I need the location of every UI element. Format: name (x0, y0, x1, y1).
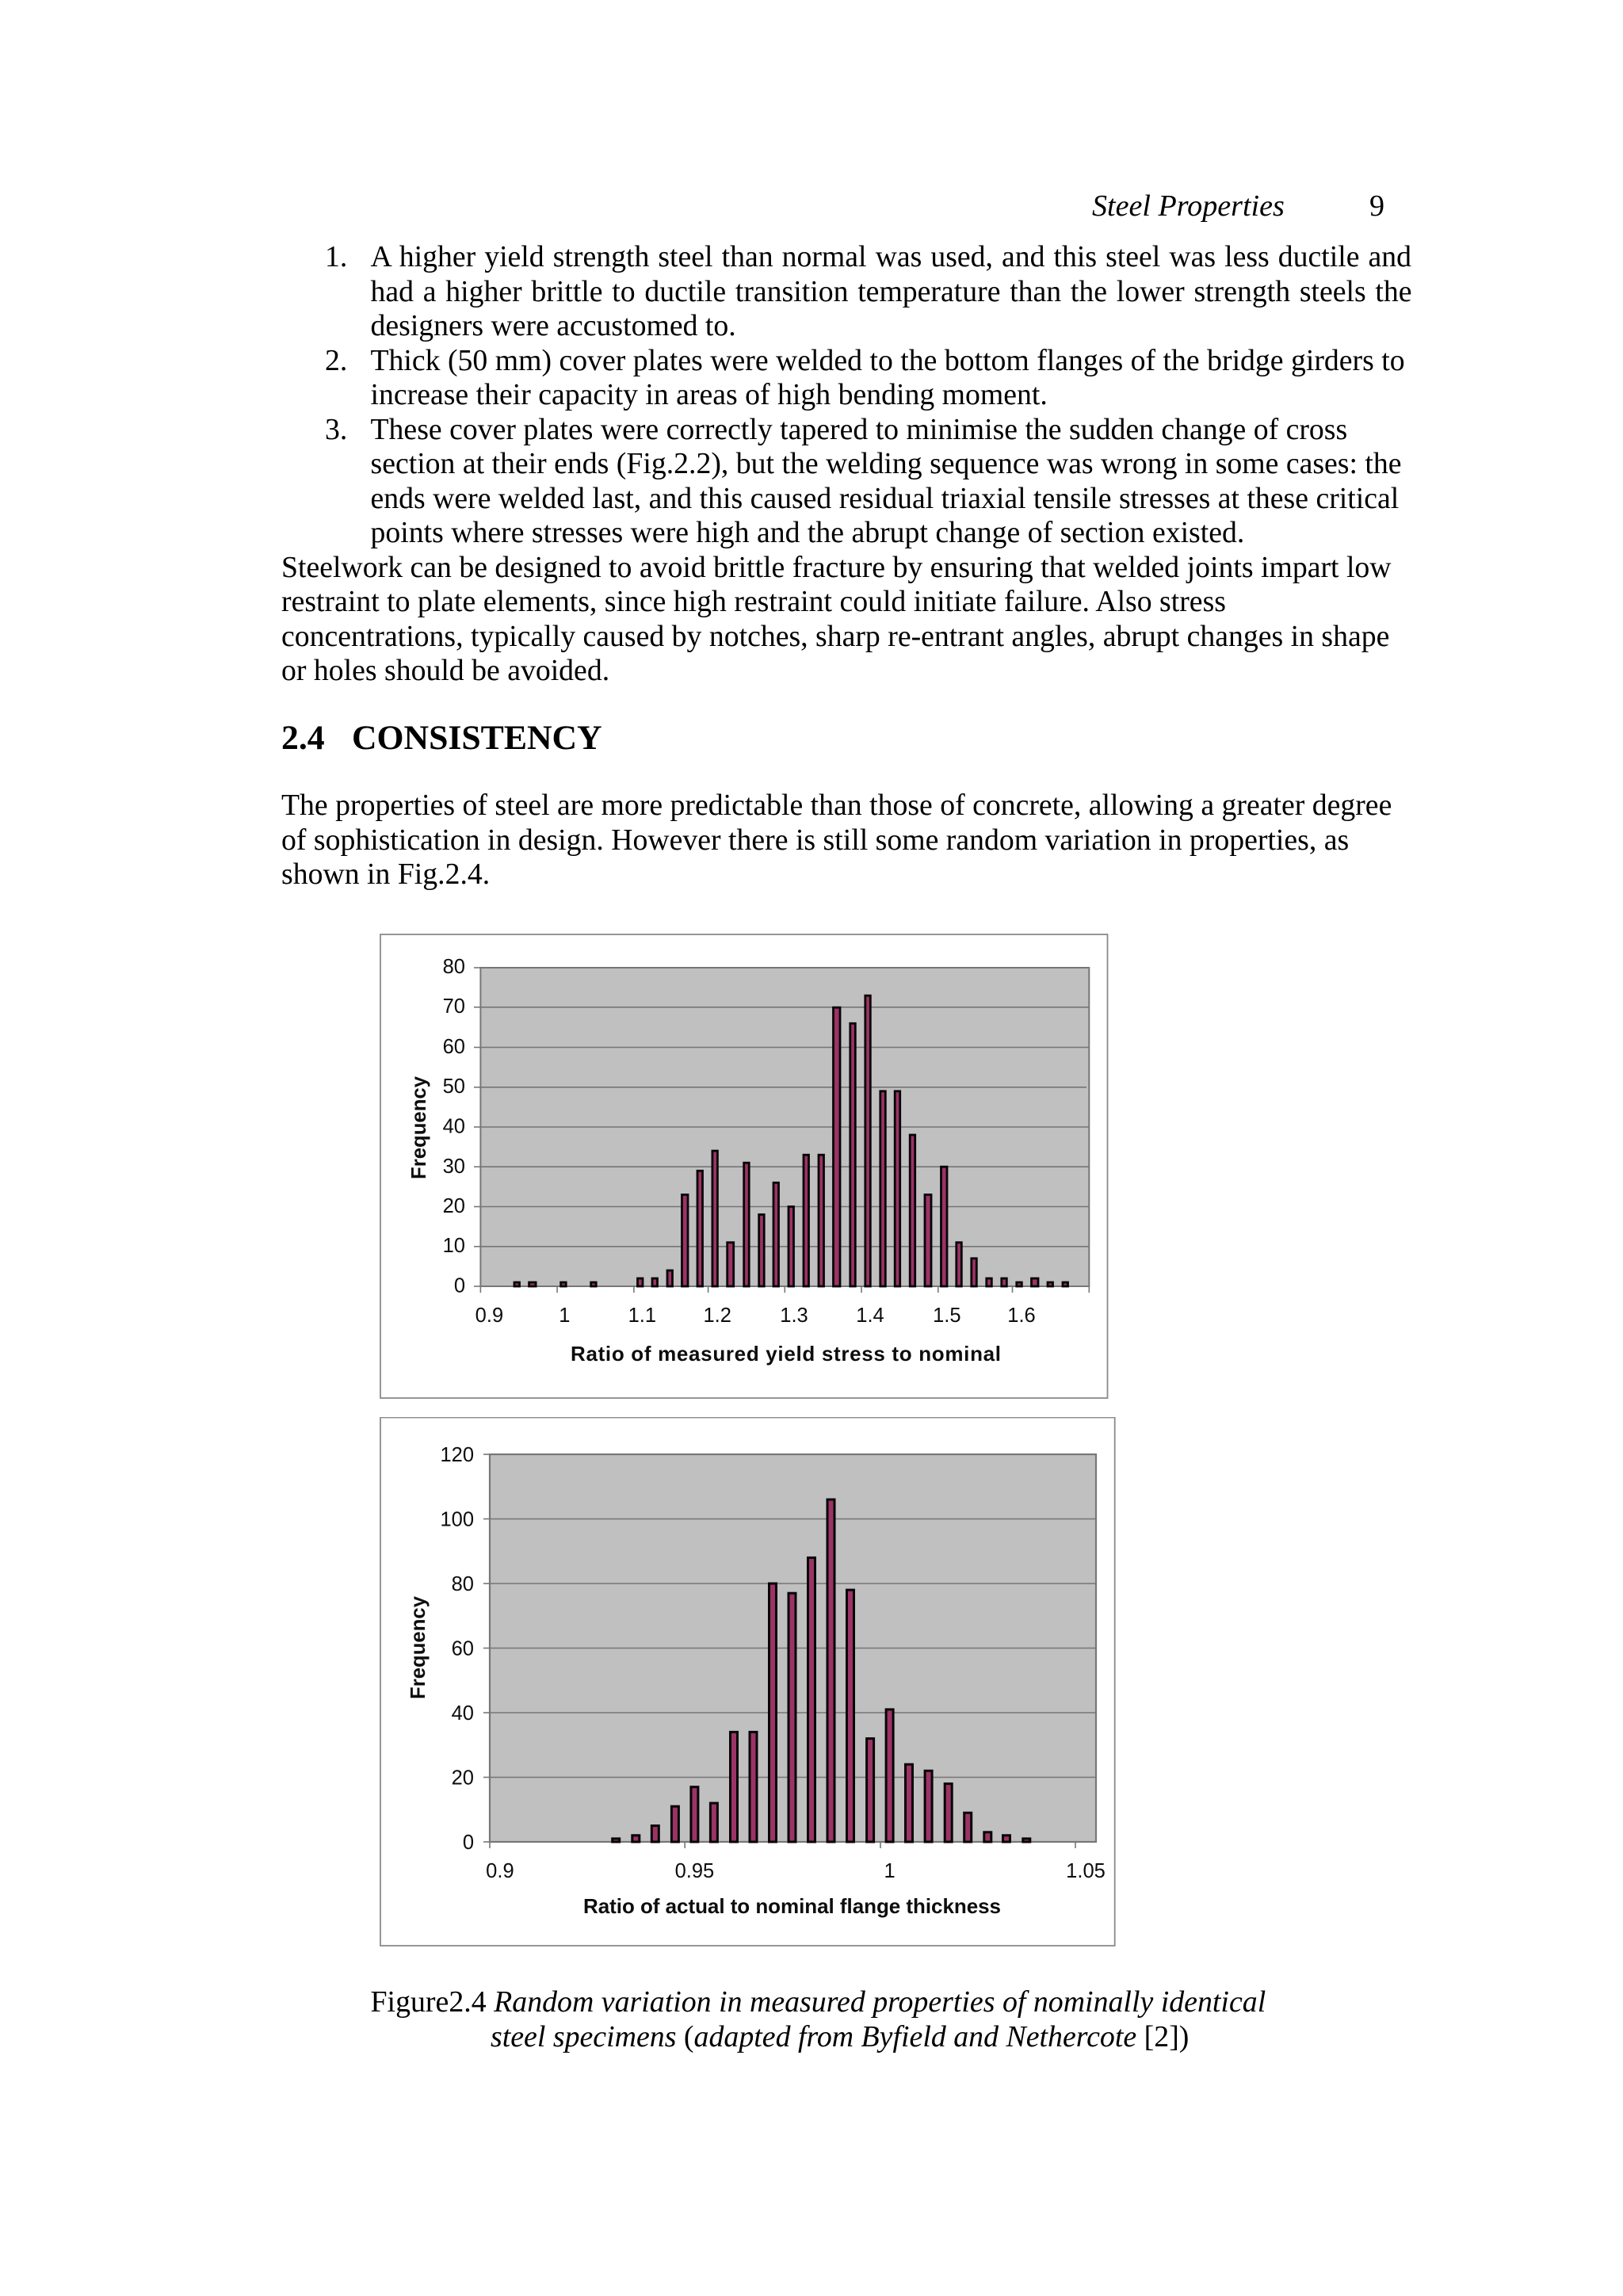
list item 2: 2. (325, 344, 347, 377)
paragraph: avoiding brittle fracture: concentrations, typically caused by notches, sharp re-entrant angles, abrupt changes in shape (281, 620, 1389, 653)
list item 1: had a higher brittle to ductile transition temperature than the lower strength steels the (371, 274, 1412, 308)
y axis labels: 60 (452, 1637, 474, 1660)
x axis labels: 1 (559, 1305, 570, 1327)
x axis labels: 1.1 (628, 1305, 656, 1327)
x axis labels: 0.9 (486, 1860, 514, 1882)
figure caption: steel specimens (adapted from Byfield and Nethercote [2]) (491, 2019, 1189, 2053)
y axis labels: 20 (452, 1767, 474, 1790)
y axis labels: 80 (452, 1573, 474, 1595)
list item 3: section at their ends (Fig.2.2), but the welding sequence was wrong in some cases: the (371, 447, 1402, 480)
list item 1: designers were accustomed to. (371, 309, 736, 342)
y axis labels: 40 (443, 1116, 465, 1138)
x axis labels (486, 1860, 1106, 1882)
y axis labels: 120 (440, 1444, 474, 1466)
x axis labels: 1 (884, 1860, 896, 1882)
bars (613, 1499, 1030, 1842)
plot area (480, 968, 1089, 1286)
chart panel: flange thickness histogram (380, 1417, 1116, 1946)
figure caption: Figure2.4 Random variation in measured properties of nominally identical (371, 1985, 1266, 2019)
y axis labels: 10 (443, 1235, 465, 1257)
section heading: CONSISTENCY (352, 719, 602, 757)
x axis labels (475, 1305, 1036, 1327)
x axis labels: 1.6 (1007, 1305, 1036, 1327)
paragraph: consistency (281, 789, 1392, 891)
paragraph: avoiding brittle fracture: Steelwork can be designed to avoid brittle fracture by ensuring that welded joints impart low (281, 550, 1392, 583)
figure caption (371, 1985, 1266, 2053)
x axis labels: 0.95 (675, 1860, 714, 1882)
list item 3: 3. (325, 412, 347, 445)
x axis labels: 1.4 (856, 1305, 884, 1327)
y axis labels: 30 (443, 1156, 465, 1178)
running header: 9 (1369, 189, 1384, 222)
y axis title: Frequency (406, 1595, 430, 1699)
x axis labels: 0.9 (475, 1305, 503, 1327)
y axis labels: 100 (440, 1509, 474, 1531)
y axis labels: 50 (443, 1075, 465, 1098)
y axis labels: 0 (454, 1274, 465, 1297)
list item 3: These cover plates were correctly tapered to minimise the sudden change of cross (371, 412, 1347, 445)
paragraph: avoiding brittle fracture: or holes should be avoided. (281, 654, 609, 687)
x axis title: Ratio of measured yield stress to nominal (571, 1342, 1001, 1366)
chart panel: yield stress histogram (380, 934, 1108, 1399)
list item 3 (325, 412, 1402, 549)
x axis labels: 1.3 (780, 1305, 808, 1327)
x axis title: Ratio of actual to nominal flange thickness (583, 1894, 1001, 1918)
y axis labels: 40 (452, 1702, 474, 1725)
y axis labels: 20 (443, 1195, 465, 1217)
plot area (490, 1454, 1096, 1842)
bars (514, 995, 1068, 1286)
running header (1092, 189, 1384, 222)
list item 2: increase their capacity in areas of high bending moment. (371, 378, 1048, 411)
y axis labels: 0 (463, 1832, 474, 1854)
list item 2: Thick (50 mm) cover plates were welded to the bottom flanges of the bridge girders to (371, 344, 1405, 377)
y axis labels: 60 (443, 1036, 465, 1058)
x axis labels: 1.05 (1066, 1860, 1106, 1882)
list item 3: points where stresses were high and the abrupt change of section existed. (371, 516, 1244, 549)
y axis labels: 70 (443, 995, 465, 1018)
x axis labels: 1.2 (703, 1305, 731, 1327)
y axis title: Frequency (407, 1075, 430, 1179)
paragraph: consistency: The properties of steel are more predictable than those of concrete, allowing a greater degree (281, 789, 1392, 822)
list item 1: A higher yield strength steel than normal was used, and this steel was less ductile and (371, 240, 1411, 273)
section heading: 2.4 (281, 719, 325, 757)
list item 3: ends were welded last, and this caused residual triaxial tensile stresses at these critical (371, 482, 1399, 515)
list item 2 (325, 344, 1405, 411)
list item 1: 1. (325, 240, 347, 273)
paragraph: consistency: shown in Fig.2.4. (281, 858, 490, 891)
y axis labels: 80 (443, 956, 465, 978)
paragraph: avoiding brittle fracture: restraint to plate elements, since high restraint could initiate failure. Also stress (281, 585, 1226, 618)
y axis labels (440, 1444, 474, 1854)
running header: Steel Properties (1092, 189, 1285, 222)
paragraph: avoiding brittle fracture (281, 550, 1392, 687)
paragraph: consistency: of sophistication in design. However there is still some random variation in properties, as (281, 823, 1349, 856)
list item 1 (325, 240, 1412, 342)
x axis labels: 1.5 (933, 1305, 961, 1327)
y axis labels (443, 956, 465, 1297)
